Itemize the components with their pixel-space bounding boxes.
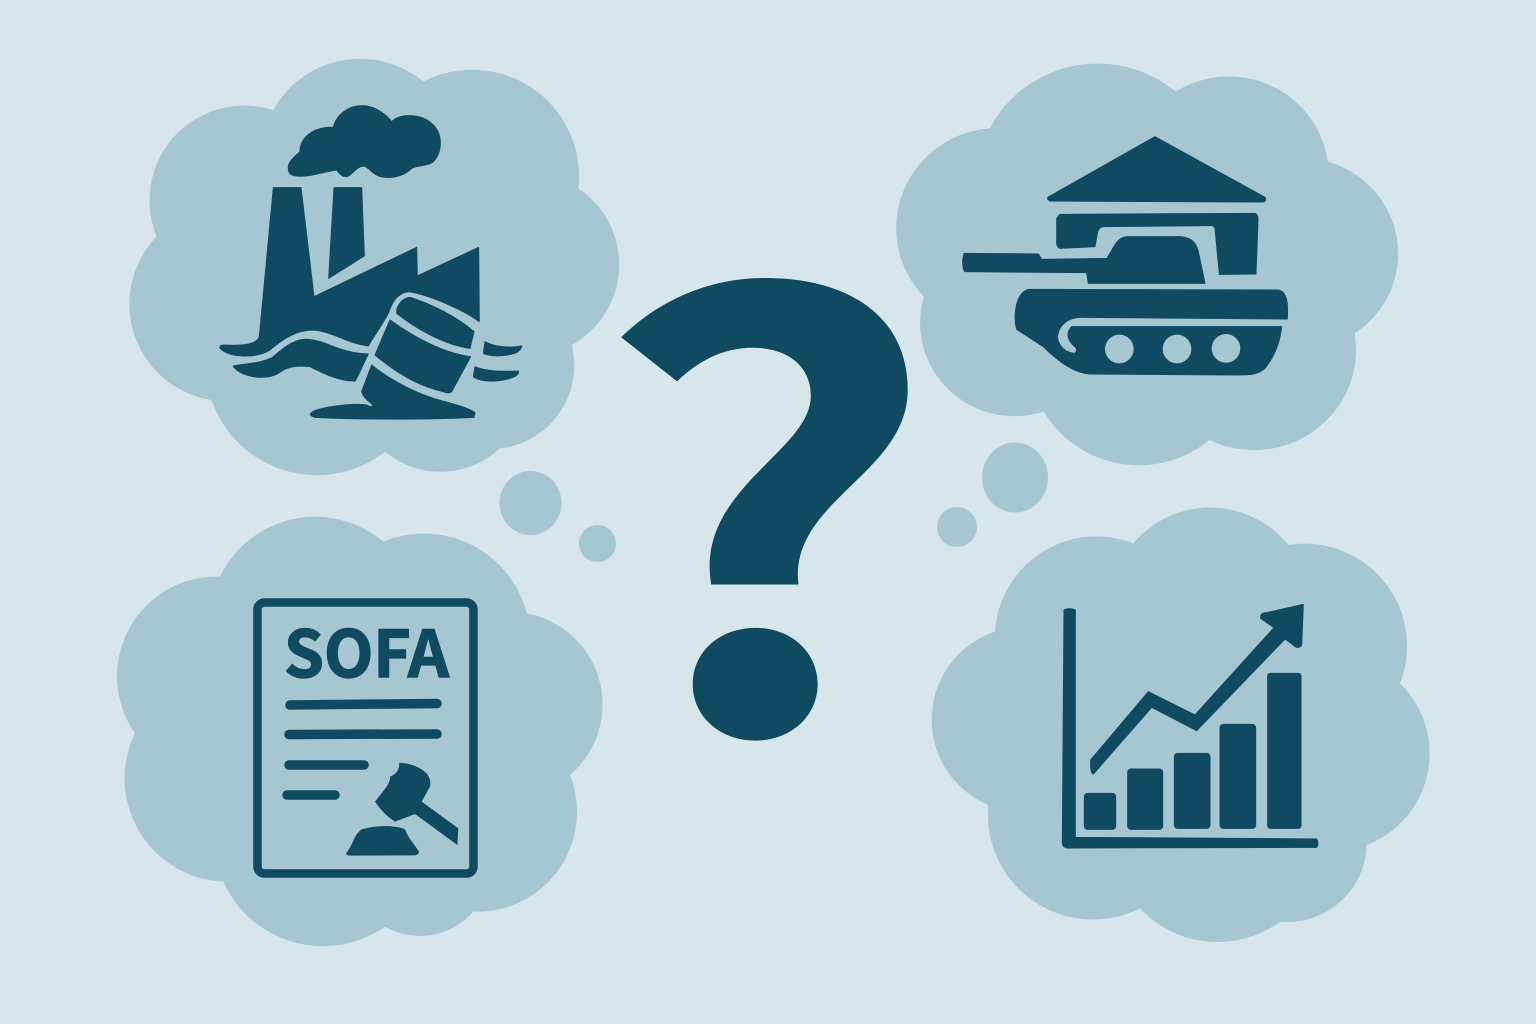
gavel <box>346 763 458 856</box>
panel: pollution thought cloud <box>129 59 619 475</box>
icon: legal document with gavel <box>258 602 474 874</box>
icon: rising bar chart with arrow <box>1062 604 1318 848</box>
central question mark: ? <box>590 52 941 902</box>
cloud shape: SOFA <box>117 517 603 946</box>
cloud shape: military <box>896 64 1398 465</box>
document frame <box>258 602 474 874</box>
thought bubbles: right <box>937 442 1048 547</box>
cloud shape: growth <box>932 508 1430 942</box>
icon: tank under a roofed base <box>963 137 1288 375</box>
document text lines <box>287 704 437 795</box>
thought bubbles: left <box>500 471 616 562</box>
cloud shape: pollution <box>129 59 619 475</box>
panel: military base thought cloud <box>896 64 1398 465</box>
panel: economic growth thought cloud <box>932 508 1430 942</box>
panel: SOFA agreement thought cloud <box>117 517 603 946</box>
icon: factory with smoke and leaking barrel <box>220 106 522 419</box>
document title: SOFA <box>284 604 450 696</box>
